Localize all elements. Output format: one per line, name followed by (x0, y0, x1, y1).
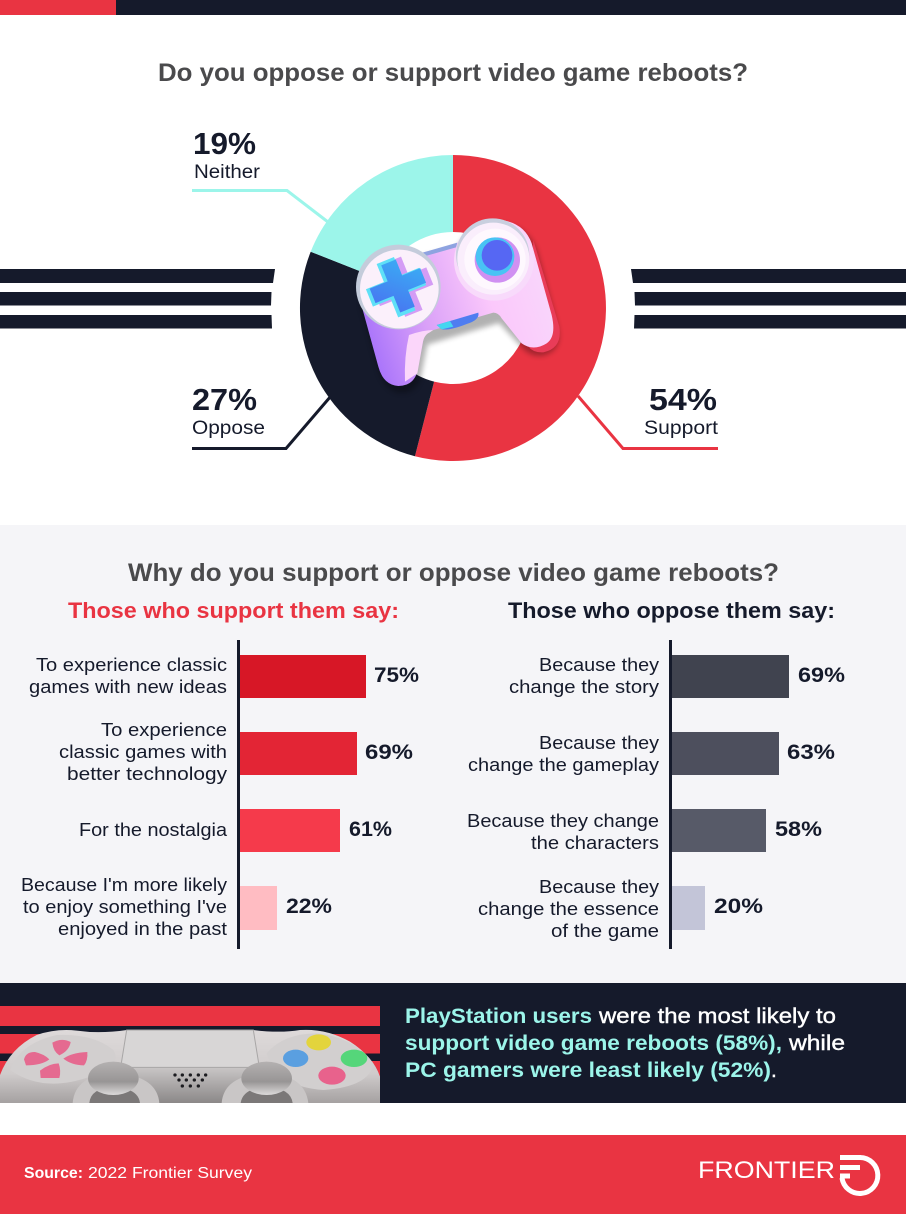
logo: frontier (698, 1155, 878, 1193)
bar: story (509, 654, 845, 698)
source: Source: (24, 1165, 83, 1182)
footer (0, 1135, 906, 1214)
callout text: PlayStation users (405, 1005, 592, 1028)
d-pad buttons (24, 1040, 87, 1078)
bar: better technology: classic games with (59, 741, 227, 762)
bar: nostalgia: For the nostalgia (79, 819, 228, 840)
bar: story: 69% (798, 663, 845, 687)
bar: essence (478, 876, 763, 941)
bar: enjoyed in the past (21, 874, 332, 939)
bar: characters: the characters (531, 832, 659, 853)
thumbsticks (73, 1073, 159, 1103)
icon: gamepad (356, 218, 560, 393)
leader line: support (578, 396, 718, 448)
bar: gameplay: change the gameplay (468, 754, 660, 775)
bar: essence: of the game (551, 920, 659, 941)
heading: oppose column: Those who oppose them say: (508, 598, 835, 623)
bar: enjoyed in the past: Because I'm more likely (21, 874, 228, 895)
bar: gameplay: Because they (539, 732, 660, 753)
label: neither: 19% (193, 126, 256, 161)
bar: essence: change the essence (478, 898, 659, 919)
label: support: Support (644, 418, 719, 439)
bar: enjoyed in the past: 22% (286, 894, 332, 918)
bar: better technology: 69% (365, 740, 413, 764)
bar: classic new ideas: To experience classic (36, 654, 227, 675)
bar: classic new ideas (29, 654, 419, 698)
callout text (405, 1005, 845, 1082)
label: neither (193, 126, 261, 183)
callout text: PC gamers were least likely (52%) (405, 1059, 771, 1082)
bar: better technology: better technology (67, 763, 228, 784)
bar: essence: Because they (539, 876, 660, 897)
callout text: while (788, 1032, 845, 1055)
heading: support column: Those who support them say: (68, 598, 399, 623)
source (24, 1165, 252, 1182)
segment: oppose 27% (300, 252, 434, 456)
bar: enjoyed in the past: to enjoy something I've (23, 896, 227, 917)
logo: frontier: FRONTIER (698, 1157, 835, 1184)
bar: story: Because they (539, 654, 660, 675)
right stick (454, 218, 534, 301)
heading: why: Why do you support or oppose video game reboots? (128, 559, 779, 587)
label: support: 54% (649, 382, 717, 417)
decorative stripes right (631, 269, 906, 328)
label: oppose: 27% (192, 382, 257, 417)
segment: support 54% (415, 155, 606, 461)
bar: essence: 20% (714, 894, 763, 918)
label: oppose (192, 382, 265, 439)
panel: reasons (0, 525, 906, 983)
segment: neither 19% (311, 155, 453, 280)
label: oppose: Oppose (192, 418, 265, 439)
bar chart: support (21, 640, 419, 949)
red stripes (0, 1006, 380, 1081)
panel: callout band (0, 983, 906, 1103)
bar: nostalgia: 61% (349, 817, 392, 841)
top bar (0, 0, 906, 15)
bar chart: oppose (467, 640, 845, 949)
bar: characters: Because they change (467, 810, 659, 831)
bar: story: change the story (509, 676, 660, 697)
bar: enjoyed in the past: enjoyed in the past (58, 918, 227, 939)
colored buttons (306, 1034, 331, 1050)
bar: better technology (59, 719, 413, 784)
title: Do you oppose or support video game reboots? (158, 59, 748, 87)
bar: nostalgia (79, 809, 392, 852)
label: support (644, 382, 719, 439)
bar: gameplay (468, 732, 835, 775)
label: neither: Neither (194, 162, 261, 183)
bar: characters: 58% (775, 817, 822, 841)
bar: characters (467, 809, 822, 853)
bar: gameplay: 63% (787, 740, 835, 764)
callout text: . (771, 1059, 777, 1082)
leader line: neither (192, 190, 328, 222)
callout text: were the most likely to (598, 1005, 836, 1028)
leader line: oppose (192, 396, 331, 448)
left d-pad (356, 245, 441, 329)
callout text: support video game reboots (58%), (405, 1032, 782, 1055)
source: 2022 Frontier Survey (88, 1165, 252, 1182)
decorative stripes left (0, 269, 275, 328)
icon: console controller (0, 1030, 380, 1103)
bar: classic new ideas: 75% (374, 663, 419, 687)
donut chart (300, 155, 606, 461)
speaker dots (173, 1073, 207, 1088)
bar: better technology: To experience (101, 719, 227, 740)
bar: classic new ideas: games with new ideas (29, 676, 227, 697)
